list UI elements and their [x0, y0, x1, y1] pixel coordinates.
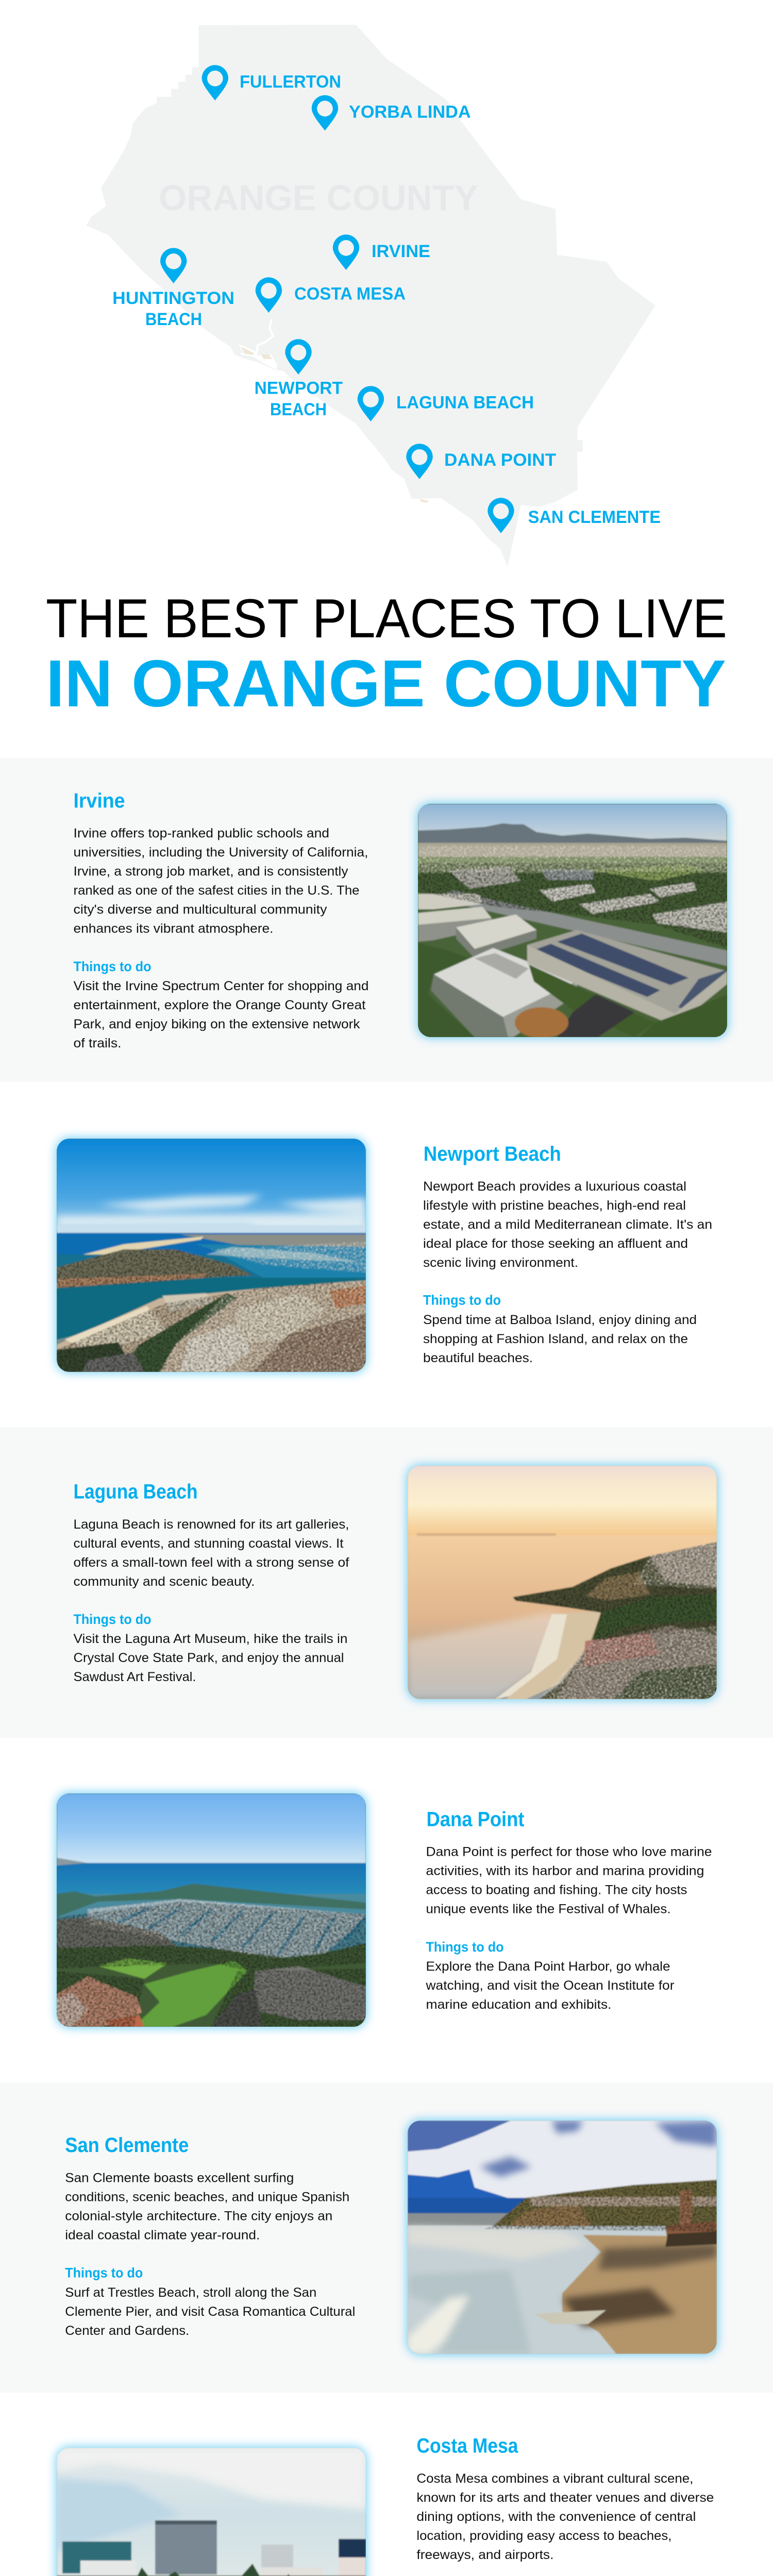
- pin: Costa Mesa: COSTA MESA: [294, 284, 406, 304]
- heading: San Clemente: San Clemente: [65, 2134, 189, 2157]
- pin: Yorba Linda: YORBA LINDA: [349, 103, 471, 122]
- subheading: Things to do: Things to do: [65, 2265, 143, 2280]
- text: Irvine description: Irvine offers top-ranked public schools and: [73, 826, 329, 841]
- text: Laguna Beach description: community and scenic beauty.: [73, 1574, 255, 1589]
- text: Dana Point description: [426, 1844, 712, 1917]
- pin: Yorba Linda: [312, 95, 471, 131]
- text: Dana Point description: access to boating and fishing. The city hosts: [426, 1883, 687, 1897]
- text: Costa Mesa description: Costa Mesa combines a vibrant cultural scene,: [416, 2471, 693, 2486]
- text: Irvine description: [73, 826, 368, 936]
- text: San Clemente description: [65, 2171, 349, 2242]
- text: Irvine description: universities, including the University of California,: [73, 845, 368, 859]
- title: THE BEST PLACES TO LIVE: [46, 587, 727, 649]
- text: Newport Beach description: scenic living environment.: [423, 1256, 578, 1270]
- panel: Costa Mesa: [48, 2438, 713, 2576]
- text: Newport Beach description: ideal place for those seeking an affluent and: [423, 1236, 688, 1251]
- text: Irvine description: city's diverse and multicultural community: [73, 903, 327, 917]
- photo: Dana Point marina: [56, 1792, 367, 2028]
- pin: Laguna Beach: [358, 386, 534, 421]
- subheading: Things to do: Things to do: [73, 1612, 152, 1627]
- text: Irvine things to do: Park, and enjoy biking on the extensive network: [73, 1017, 360, 1031]
- text: Costa Mesa description: [416, 2471, 714, 2562]
- heading: Newport Beach: Newport Beach: [424, 1143, 561, 1165]
- text: Newport Beach things to do: [423, 1313, 697, 1365]
- text: Laguna Beach description: [73, 1517, 349, 1589]
- text: Newport Beach description: Newport Beach provides a luxurious coastal: [423, 1179, 686, 1194]
- text: Laguna Beach description: offers a small-town feel with a strong sense of: [73, 1555, 349, 1570]
- text: Laguna Beach description: cultural events, and stunning coastal views. It: [73, 1536, 344, 1551]
- photo: Irvine aerial campus: [417, 803, 728, 1038]
- map: Orange County: [86, 25, 661, 567]
- panel: Dana Point: [48, 1786, 711, 2035]
- text: Dana Point things to do: [425, 1959, 674, 2012]
- pin: Newport Beach: NEWPORT: [255, 379, 343, 398]
- title: [46, 587, 727, 721]
- pin: Fullerton: [202, 65, 341, 100]
- pin: San Clemente: SAN CLEMENTE: [528, 507, 661, 527]
- subheading: Things to do: Things to do: [423, 1292, 501, 1308]
- heading: Dana Point: Dana Point: [427, 1808, 525, 1831]
- heading: Irvine: Irvine: [73, 789, 125, 812]
- text: San Clemente description: ideal coastal climate year-round.: [65, 2228, 260, 2242]
- pin: Irvine: [333, 234, 430, 270]
- title: IN ORANGE COUNTY: [46, 647, 726, 721]
- text: Newport Beach things to do: beautiful beaches.: [423, 1351, 533, 1365]
- photo: Costa Mesa skyline: [56, 2447, 367, 2576]
- text: San Clemente description: conditions, scenic beaches, and unique Spanish: [65, 2190, 349, 2204]
- pin: Laguna Beach: LAGUNA BEACH: [396, 393, 534, 413]
- pin: Dana Point: [406, 444, 556, 479]
- text: Laguna Beach things to do: Visit the Laguna Art Museum, hike the trails in: [73, 1632, 347, 1646]
- text: Laguna Beach things to do: Crystal Cove State Park, and enjoy the annual: [73, 1651, 344, 1665]
- text: Irvine things to do: Visit the Irvine Spectrum Center for shopping and: [73, 979, 369, 993]
- text: Laguna Beach things to do: [73, 1632, 347, 1684]
- text: Newport Beach things to do: shopping at Fashion Island, and relax on the: [423, 1332, 688, 1346]
- heading: Costa Mesa: Costa Mesa: [416, 2435, 518, 2458]
- text: Dana Point description: activities, with its harbor and marina providing: [426, 1864, 704, 1878]
- text: San Clemente description: colonial-style architecture. The city enjoys an: [65, 2209, 332, 2224]
- map title: ORANGE COUNTY: [159, 178, 478, 218]
- text: San Clemente description: San Clemente boasts excellent surfing: [65, 2171, 294, 2185]
- map bay detail: [239, 319, 429, 503]
- pin: Costa Mesa: [256, 277, 406, 313]
- heading: Laguna Beach: Laguna Beach: [73, 1481, 198, 1503]
- text: Costa Mesa description: freeways, and airports.: [416, 2548, 553, 2562]
- map shape: [86, 25, 656, 567]
- text: Costa Mesa description: dining options, with the convenience of central: [416, 2510, 696, 2524]
- text: San Clemente things to do: [65, 2285, 355, 2338]
- text: Irvine description: ranked as one of the safest cities in the U.S. The: [73, 883, 360, 897]
- text: Newport Beach description: [423, 1179, 712, 1270]
- pin: Newport Beach: [255, 339, 343, 419]
- text: Newport Beach things to do: Spend time at Balboa Island, enjoy dining and: [423, 1313, 697, 1327]
- pin: San Clemente: [488, 498, 661, 533]
- pin: Fullerton: FULLERTON: [240, 72, 341, 92]
- pin: Huntington Beach: [112, 248, 234, 329]
- text: Irvine things to do: of trails.: [73, 1036, 122, 1050]
- photo: Laguna Beach sunset coast: [407, 1465, 718, 1700]
- text: Laguna Beach things to do: Sawdust Art Festival.: [73, 1670, 196, 1684]
- text: Dana Point description: unique events like the Festival of Whales.: [426, 1902, 671, 1917]
- text: Irvine things to do: entertainment, explore the Orange County Great: [73, 998, 366, 1012]
- text: San Clemente things to do: Clemente Pier, and visit Casa Romantica Cultural: [65, 2304, 355, 2319]
- text: Dana Point things to do: watching, and visit the Ocean Institute for: [425, 1978, 674, 1993]
- text: Newport Beach description: lifestyle with pristine beaches, high-end real: [423, 1198, 686, 1213]
- text: Irvine description: enhances its vibrant atmosphere.: [73, 921, 273, 936]
- text: Newport Beach description: estate, and a mild Mediterranean climate. It's an: [423, 1217, 712, 1232]
- pin: Dana Point: DANA POINT: [444, 450, 556, 470]
- text: Costa Mesa description: known for its arts and theater venues and diverse: [416, 2490, 714, 2505]
- text: Costa Mesa description: location, providing easy access to beaches,: [416, 2529, 671, 2543]
- text: San Clemente things to do: Center and Gardens.: [65, 2324, 189, 2338]
- text: Dana Point description: Dana Point is perfect for those who love marine: [426, 1844, 712, 1859]
- panel: Newport Beach: [48, 1130, 711, 1380]
- photo: San Clemente beach: [407, 2120, 718, 2355]
- pin: Newport Beach: BEACH: [270, 400, 327, 419]
- pin: Irvine: IRVINE: [372, 242, 430, 261]
- text: Dana Point things to do: marine education and exhibits.: [426, 1997, 611, 2012]
- text: Laguna Beach description: Laguna Beach is renowned for its art galleries,: [73, 1517, 349, 1532]
- text: Irvine things to do: [73, 979, 369, 1050]
- pin: Huntington Beach: HUNTINGTON: [112, 289, 234, 308]
- text: San Clemente things to do: Surf at Trestles Beach, stroll along the San: [65, 2285, 316, 2300]
- subheading: Things to do: Things to do: [426, 1939, 504, 1955]
- text: Irvine description: Irvine, a strong job market, and is consistently: [73, 865, 348, 879]
- panel: San Clemente: [65, 2109, 728, 2365]
- text: Dana Point things to do: Explore the Dana Point Harbor, go whale: [426, 1959, 670, 1974]
- photo: Newport Beach harbor: [56, 1138, 367, 1373]
- pin: Huntington Beach: BEACH: [145, 310, 202, 329]
- panel: Irvine: [73, 792, 738, 1048]
- panel: Laguna Beach: [73, 1454, 728, 1710]
- subheading: Things to do: Things to do: [73, 959, 152, 974]
